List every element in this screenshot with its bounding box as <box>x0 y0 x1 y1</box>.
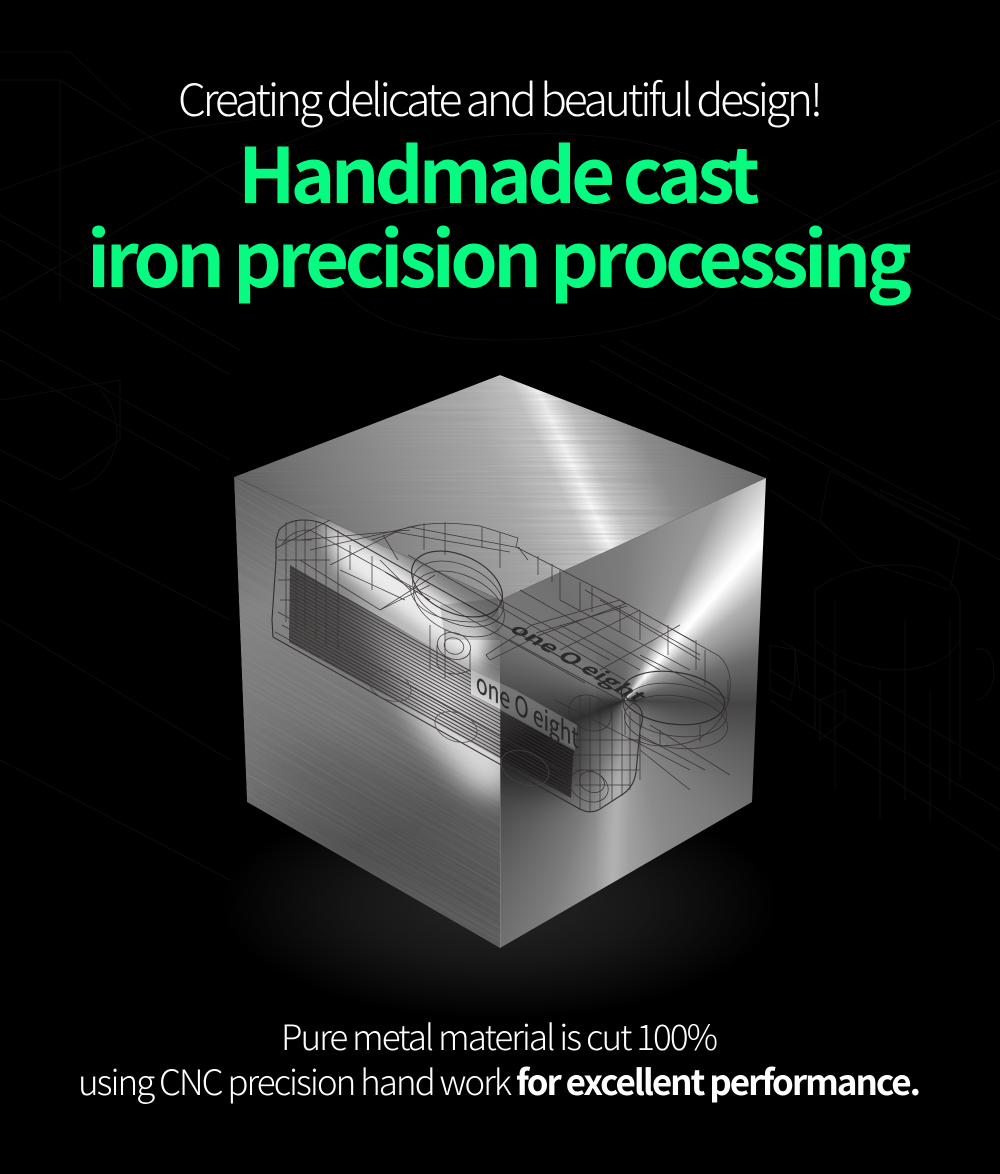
wire grid at lower right <box>575 695 640 812</box>
ring at right end <box>618 665 731 755</box>
title: Handmade cast <box>238 115 760 225</box>
bottom caption <box>78 1010 921 1106</box>
cube left face <box>234 477 500 948</box>
ring near centre <box>401 538 515 650</box>
title <box>87 115 912 309</box>
bottom caption: Pure metal material is cut 100% <box>281 1010 718 1061</box>
background glow beneath cube <box>220 790 780 1020</box>
highlight: upper streak <box>320 520 490 670</box>
embossed logo on top plate: one O eight <box>503 619 655 706</box>
ribbed side panel <box>289 565 575 798</box>
bottom caption: for excellent performance. <box>516 1055 921 1106</box>
rear body plate outline <box>372 523 730 746</box>
long interior lines <box>330 530 690 770</box>
cube top face <box>230 370 770 605</box>
nameplate <box>471 660 579 757</box>
nameplate: one O eight <box>476 660 579 757</box>
cube right face shading <box>490 640 632 948</box>
connecting strap <box>486 600 627 660</box>
bottom caption: using CNC precision hand work <box>78 1055 512 1106</box>
panel circles <box>297 623 554 792</box>
subtitle: Creating delicate and beautiful design! <box>178 64 823 129</box>
device wireframe inside cube <box>272 520 731 812</box>
cube right face <box>500 478 766 948</box>
title: iron precision processing <box>87 199 912 309</box>
outer body outline <box>272 520 642 812</box>
screw bosses <box>430 625 617 808</box>
